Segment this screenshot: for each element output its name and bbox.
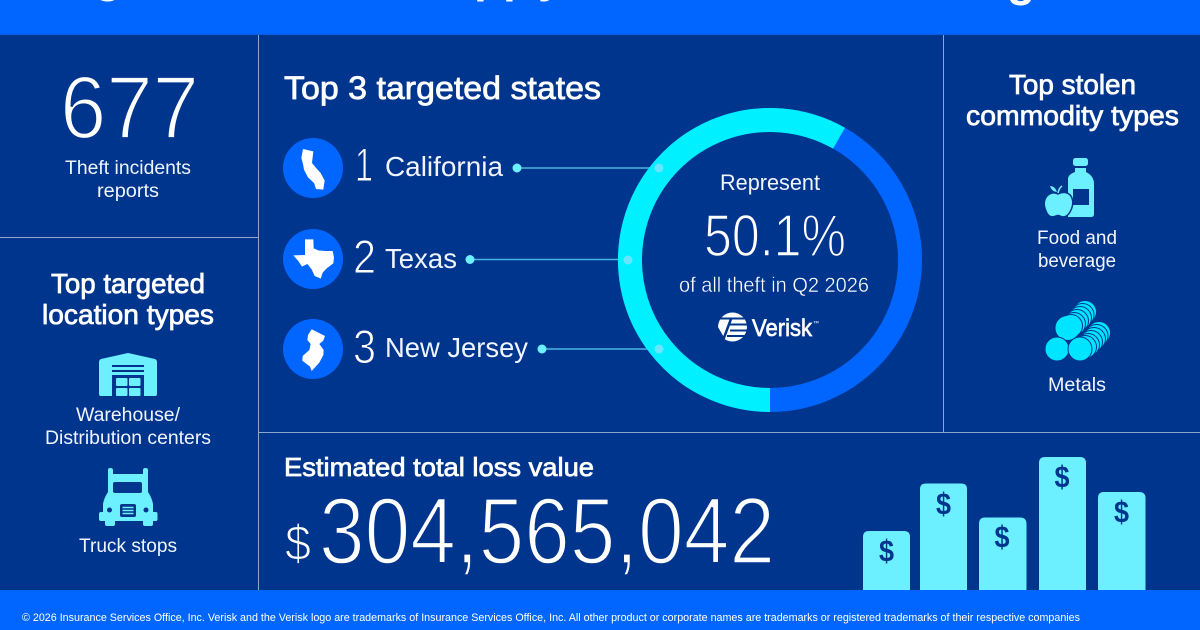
heading: location types: Top targeted	[51, 268, 205, 299]
state row: California	[283, 138, 659, 198]
bar chart of dollars: $	[1114, 494, 1129, 529]
incident label	[65, 157, 191, 202]
icon: food and beverage	[1044, 158, 1094, 217]
state row: New Jersey: New Jersey	[385, 332, 528, 363]
state row: New Jersey: 3	[353, 320, 376, 373]
bar chart of dollars: $	[936, 486, 951, 521]
food label: beverage	[1038, 251, 1116, 272]
heading: commodity types: Top stolen	[1009, 69, 1136, 100]
Verisk logo: ™	[813, 320, 819, 327]
donut value: 50.1%	[704, 203, 846, 269]
state row: Texas: 2	[353, 230, 376, 283]
icon: metals	[1045, 300, 1110, 361]
footer	[0, 590, 1200, 630]
heading: commodity types	[966, 69, 1179, 131]
donut caption: of all theft in Q2 2026	[679, 274, 869, 297]
bar chart of dollars	[863, 457, 1146, 590]
incident count: 677	[60, 57, 199, 157]
state row: California: California	[385, 151, 503, 182]
state row: New Jersey	[283, 319, 659, 379]
Verisk logo: Verisk	[752, 315, 813, 342]
bar chart of dollars: $	[879, 533, 894, 568]
bar chart of dollars: $	[1054, 459, 1070, 494]
donut label: represent: Represent	[720, 170, 820, 195]
heading: location types	[42, 268, 214, 330]
truck label: Truck stops	[79, 536, 177, 557]
metals label: Metals	[1048, 375, 1106, 396]
food label: Food and	[1037, 228, 1117, 249]
incident label: reports	[97, 180, 159, 202]
top banner	[0, 0, 1200, 35]
total loss value: 304,565,042	[319, 478, 775, 584]
icon: warehouse	[99, 353, 157, 396]
food label	[1037, 228, 1117, 272]
panel: top states	[283, 70, 910, 400]
panel: theft incidents	[60, 57, 199, 202]
donut chart	[624, 120, 910, 400]
dollar sign: $	[285, 515, 311, 571]
warehouse label: Warehouse/	[76, 405, 181, 426]
state row: California: 1	[355, 138, 373, 191]
heading: top states: Top 3 targeted states	[284, 70, 601, 106]
warehouse label	[45, 405, 211, 449]
panel: total loss	[284, 452, 1146, 590]
icon: truck	[99, 468, 158, 526]
state row: Texas: Texas	[385, 243, 457, 274]
heading: location types: location types	[42, 299, 214, 330]
incident label: Theft incidents	[65, 157, 191, 179]
heading: total loss: Estimated total loss value	[284, 452, 594, 482]
panel: location types	[42, 268, 214, 557]
Verisk logo	[716, 312, 819, 342]
footer: © 2026 Insurance Services Office, Inc. Verisk and the Verisk logo are trademarks of Insurance Services Office, Inc. All other product or corporate names are trademarks or registered trademarks of their respective companies	[22, 612, 1080, 624]
heading: commodity types: commodity types	[966, 100, 1179, 131]
warehouse label: Distribution centers	[45, 428, 211, 449]
panel: commodity types	[966, 69, 1179, 396]
state row: Texas	[283, 229, 628, 289]
bar chart of dollars: $	[994, 519, 1010, 554]
